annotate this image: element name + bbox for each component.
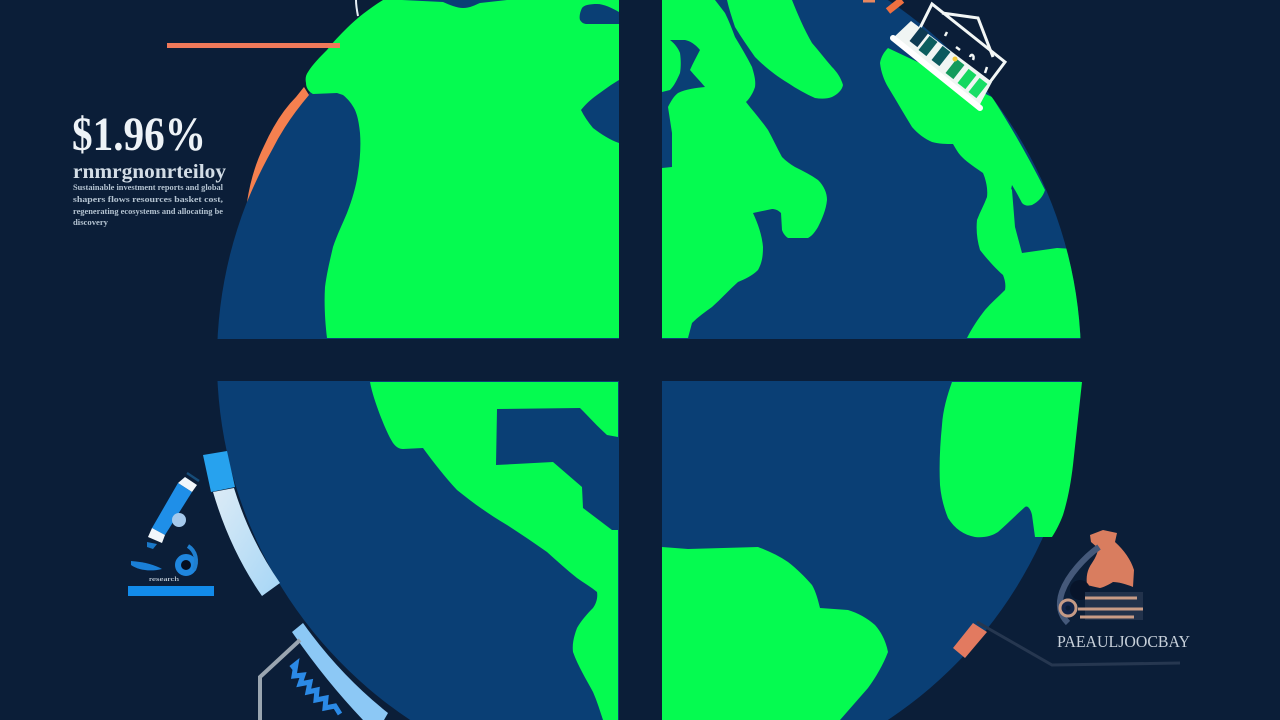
icon: microscope: research [149, 577, 179, 583]
stat description: discovery [73, 218, 108, 227]
stat description: shapers flows resources basket cost, [73, 195, 223, 204]
stat text block [72, 108, 226, 227]
land: upper peninsula [727, 0, 843, 99]
stat description [73, 183, 224, 227]
land: lower centre continent [662, 547, 888, 720]
icon: amphora [1060, 530, 1143, 623]
land: upper centre continent [662, 0, 827, 338]
land: lower right continent [940, 382, 1082, 537]
stat value: $1.96% [72, 108, 206, 161]
land: upper right continent [880, 48, 1090, 338]
stat description: regenerating ecosystems and allocating be [73, 207, 223, 216]
stat heading: rnmrgnonrteiloy [73, 161, 226, 183]
arc segment: lower left [203, 451, 280, 596]
icon: classical building [893, 4, 1005, 108]
icon: microscope [128, 473, 214, 596]
quadrant gaps [200, 0, 1100, 720]
ocean notch: top of upper left [402, 0, 507, 8]
arc segment: bottom with connector [260, 623, 388, 720]
connector and orange marker: lower right [953, 622, 1180, 665]
label: lower right: PAEAULJOOCBAY [1057, 632, 1190, 651]
orange marker: top [863, 0, 902, 11]
land: lower left continent [370, 382, 618, 720]
orange callout: upper left [167, 0, 358, 202]
stat description: Sustainable investment reports and global [73, 183, 224, 192]
land: upper left continent [306, 0, 619, 338]
globe [217, 0, 1090, 720]
